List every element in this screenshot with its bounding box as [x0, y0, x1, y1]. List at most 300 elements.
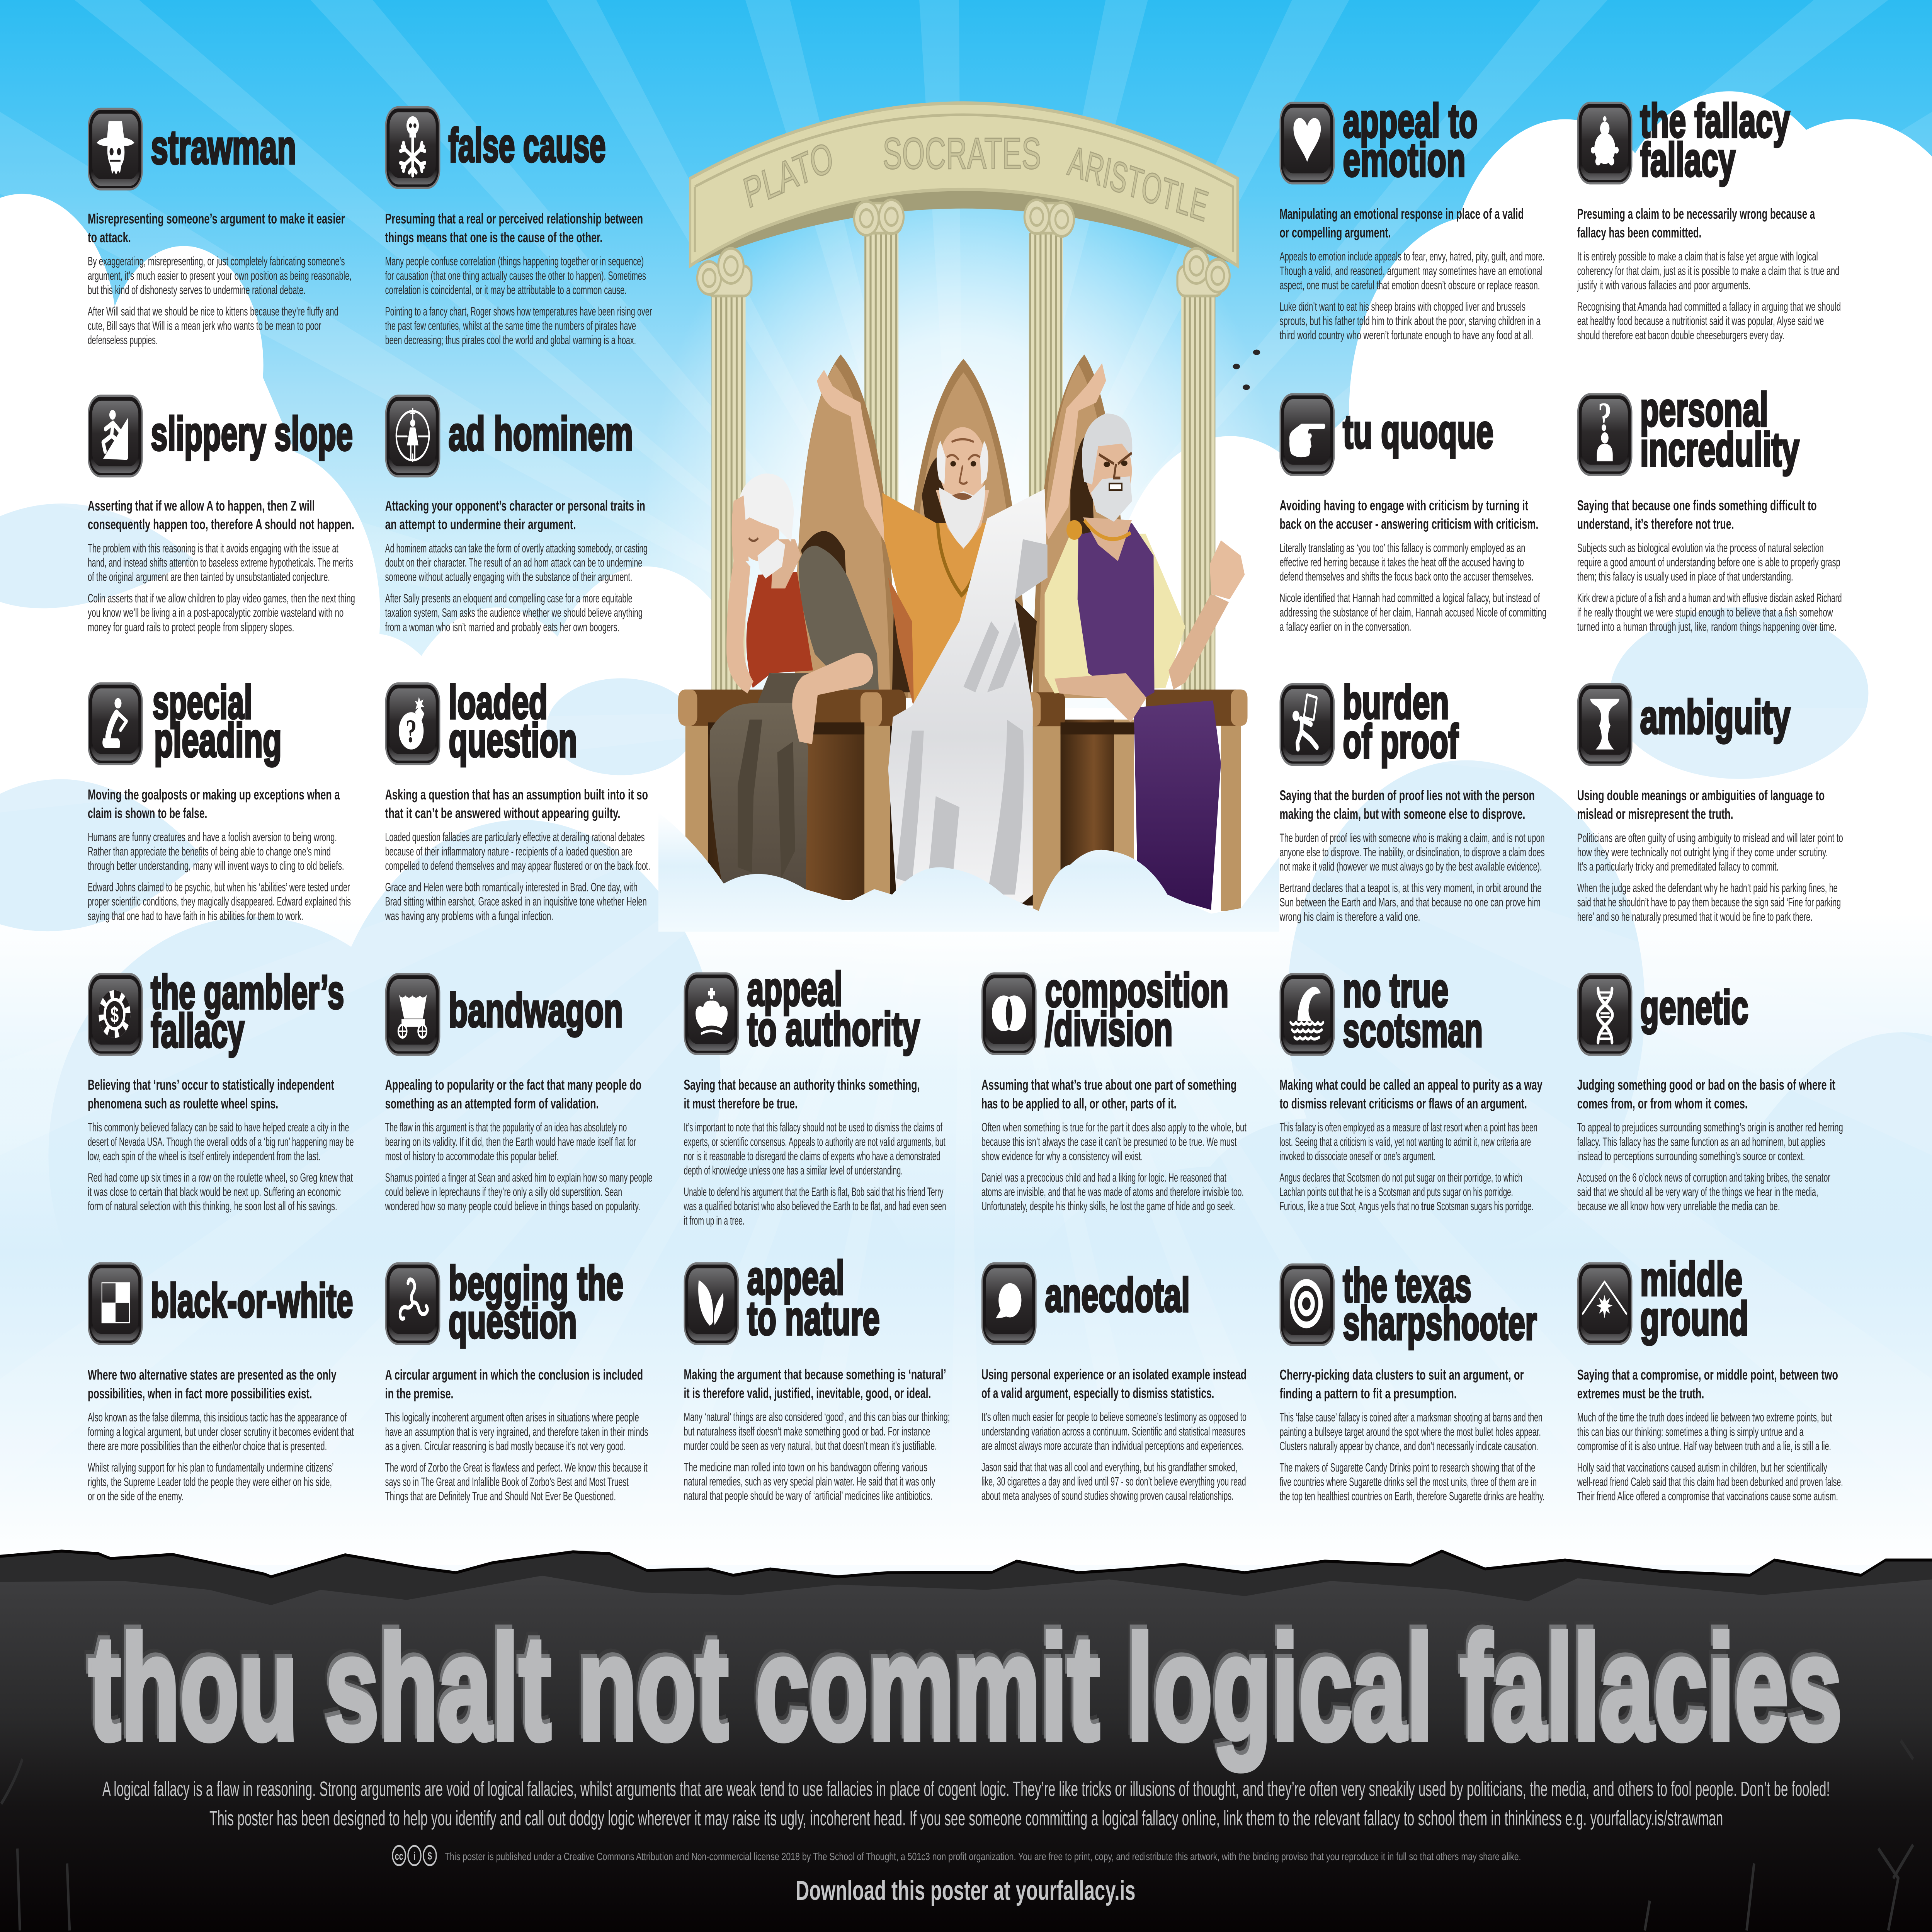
explanation and example: Many people confuse correlation (things happening together or in sequence) [385, 254, 644, 268]
clouds in front of thrones [658, 813, 1279, 932]
card: the gambler's fallacy [88, 966, 354, 1213]
explanation and example: bearing on its validity. If it did, then the Earth would have made itself flat for [385, 1135, 636, 1148]
icon: vase and faces [1577, 683, 1633, 766]
card: genetic [1577, 973, 1843, 1213]
explanation and example: third world country who weren’t fortunate enough to have any food at all. [1279, 328, 1533, 342]
explanation and example: aspect, one must be careful that emotion doesn’t obscure or replace reason. [1279, 278, 1540, 292]
explanation and example: By exaggerating, misrepresenting, or just completely fabricating someone’s [88, 254, 345, 268]
explanation and example [1279, 541, 1546, 633]
title [151, 966, 344, 1058]
explanation and example: wrong his claim is therefore a valid one. [1279, 910, 1420, 923]
explanation and example: been decreasing; thus pirates cool the world and global warming is a hoax. [385, 333, 636, 347]
title: slippery slope [151, 408, 353, 461]
explanation and example: natural remedies, such as very special plain water. He said that it was only [684, 1475, 935, 1488]
figure: Aristotle, clenched fist [1044, 413, 1245, 910]
summary [1577, 206, 1815, 241]
summary: Moving the goalposts or making up exceptions when a [88, 787, 340, 803]
icon: loch ness monster [1279, 973, 1335, 1056]
explanation and example: The flaw in this argument is that the popularity of an idea has absolutely no [385, 1121, 627, 1134]
title: incredulity [1640, 423, 1799, 476]
explanation and example: This logically incoherent argument often arises in situations where people [385, 1410, 639, 1424]
icon: bullseye target [1279, 1264, 1335, 1346]
explanation and example: Colin asserts that if we allow children to play video games, then the next thing [88, 592, 355, 605]
explanation and example: It’s important to note that this fallacy should not be used to dismiss the claims of [684, 1121, 942, 1134]
title [747, 1252, 880, 1345]
title: tu quoque [1343, 405, 1493, 458]
clouds [0, 91, 1932, 1565]
summary [1279, 1367, 1524, 1401]
explanation and example [1279, 250, 1545, 342]
explanation and example [684, 1410, 950, 1503]
explanation and example: Though a valid, and reasoned, argument may sometimes have an emotional [1279, 264, 1543, 277]
icon: heart [1279, 102, 1335, 184]
front columns [711, 293, 1215, 698]
icon: skull and snowflake [385, 106, 440, 189]
explanation and example: desert of Nevada USA. Though the overall odds of a ‘big run’ happening may be [88, 1135, 354, 1148]
explanation and example: To appeal to prejudices surrounding something’s origin is another red herring [1577, 1121, 1843, 1134]
title: question [449, 1295, 577, 1349]
card: special pleading [88, 676, 351, 923]
title: to authority [747, 1003, 920, 1056]
stone arch with names: ARISTOTLE [1065, 137, 1211, 231]
explanation and example: there are more possibilities than the either/or choice that is presented. [88, 1439, 327, 1453]
title: ambiguity [1640, 691, 1790, 744]
title: strawman [151, 121, 296, 174]
summary: Appealing to popularity or the fact that many people do [385, 1077, 641, 1093]
stone footer panel [0, 1543, 1932, 1932]
icon: DNA helix [1577, 973, 1633, 1056]
title: genetic [1640, 981, 1748, 1034]
card: ad hominem [385, 395, 648, 634]
summary [1577, 1367, 1838, 1401]
intro text: A logical fallacy is a flaw in reasoning. Strong arguments are void of logical fallacies, whilst arguments that are weak tend to use fallacies in place of cogent logic. They’re like tricks or illusions of thought, and they’re often very sneakily used by politicians, the media, and others to fool people. Don’t be fooled! [102, 1777, 1830, 1801]
summary [88, 211, 345, 245]
summary [1577, 1077, 1835, 1112]
summary: Judging something good or bad on the basis of where it [1577, 1077, 1835, 1093]
explanation and example: This ‘false cause’ fallacy is coined after a marksman shooting at barns and then [1279, 1410, 1543, 1424]
summary: making the claim, but with someone else to disprove. [1279, 806, 1525, 822]
explanation and example: because this isn’t always the case it can’t be presumed to be true. We must [981, 1135, 1237, 1148]
title [1343, 1259, 1537, 1350]
icon: casino chip [88, 973, 143, 1056]
icon: crosshair on person [385, 395, 440, 478]
icon: crown [684, 972, 739, 1055]
explanation and example: it from up in a tree. [684, 1214, 745, 1227]
explanation and example: It’s often much easier for people to believe someone’s testimony as opposed to [981, 1410, 1247, 1424]
figure: Plato, head in hand [710, 473, 879, 889]
stone arch with names: SOCRATES [883, 129, 1041, 178]
card: ambiguity [1577, 683, 1843, 923]
explanation and example: a fallacy earlier on in the conversation. [1279, 620, 1411, 633]
summary [1577, 787, 1825, 822]
title [1640, 383, 1799, 476]
title [1045, 964, 1229, 1056]
explanation and example: if he really thought we were stupid enough to believe that a fish somehow [1577, 605, 1833, 619]
rock top face [0, 1553, 1932, 1640]
explanation and example: understanding variation across a continuum. Scientific and statistical measures [981, 1425, 1245, 1438]
summary: A circular argument in which the conclusion is included [385, 1367, 643, 1383]
icon: speech bubble [981, 1262, 1037, 1345]
explanation and example: After Sally presents an eloquent and compelling case for a more equitable [385, 592, 632, 605]
explanation and example [385, 541, 648, 634]
explanation and example: This fallacy is often employed as a measure of last resort when a point has been [1279, 1121, 1537, 1134]
explanation and example [981, 1121, 1247, 1213]
title [153, 676, 282, 767]
card: appeal to authority [684, 963, 946, 1227]
explanation and example: Whilst rallying support for his plan to fundamentally undermine citizens’ [88, 1461, 334, 1474]
title: appeal to [1343, 94, 1478, 148]
throne seats [678, 689, 1247, 911]
explanation and example: addressing the substance of her claim, Hannah accused Nicole of committing [1279, 605, 1546, 619]
explanation and example: The makers of Sugarette Candy Drinks point to research showing that of the [1279, 1461, 1535, 1474]
intro text: This poster has been designed to help you identify and call out dodgy logic wherever it may raise its ugly, incoherent head. If you see someone committing a logical fallacy online, link them to the relevant fallacy to school them in thinkiness e.g. yourfallacy.is/strawman [209, 1806, 1723, 1830]
explanation and example: someone without actually engaging with the substance of their argument. [385, 570, 632, 584]
explanation and example: Brad sitting within earshot, Grace asked in an inquisitive tone whether Helen [385, 895, 647, 908]
summary [1279, 497, 1538, 532]
icon: kneeling figure [88, 682, 143, 765]
explanation and example: them; this fallacy is usually used in place of that understanding. [1577, 570, 1793, 583]
summary: Where two alternative states are presented as the only [88, 1367, 337, 1383]
explanation and example: compelled to defend themselves and may appear flustered or on the back foot. [385, 859, 650, 872]
summary [88, 787, 340, 821]
title: begging the [449, 1257, 623, 1310]
summary: Attacking your opponent’s character or personal traits in [385, 498, 645, 514]
summary: comes from, or from whom it comes. [1577, 1095, 1748, 1112]
explanation and example: most of history to accommodate this popular belief. [385, 1149, 559, 1163]
explanation and example: The medicine man rolled into town on his bandwagon offering various [684, 1460, 927, 1474]
explanation and example: form of natural selection with this thinking, he soon lost all of his savings. [88, 1199, 337, 1213]
explanation and example: are almost always more accurate than individual perceptions and experiences. [981, 1439, 1244, 1452]
summary: Manipulating an emotional response in place of a valid [1279, 206, 1524, 222]
explanation and example: coherency for that claim, just as it is possible to make a claim that is true and [1577, 264, 1839, 277]
title: the texas [1343, 1259, 1471, 1312]
summary: fallacy has been committed. [1577, 224, 1701, 241]
explanation and example [1279, 1121, 1537, 1213]
icon: bomb with question mark: ? [406, 713, 417, 749]
explanation and example: atoms are invisible, and that he was made of atoms and therefore invisible too. [981, 1185, 1244, 1199]
summary: phenomena such as roulette wheel spins. [88, 1095, 278, 1112]
explanation and example: argument, it’s much easier to present your own position as being reasonable, [88, 269, 352, 282]
explanation and example: Clusters naturally appear by chance, and don’t necessarily indicate causation. [1279, 1439, 1538, 1453]
title: composition [1045, 964, 1229, 1017]
explanation and example: forming a logical argument, but under closer scrutiny it becomes evident that [88, 1425, 354, 1439]
explanation and example: from a woman who isn’t married and probably eats her own boogers. [385, 620, 619, 634]
explanation and example: anyone else to disprove. The inability, or disinclination, to disprove a claim does [1279, 845, 1545, 859]
explanation and example: should therefore eat bacon double cheeseburgers every day. [1577, 328, 1784, 342]
explanation and example: hand, and instead shifts attention to baseless extreme hypotheticals. The merits [88, 556, 353, 570]
explanation and example: Loaded question fallacies are particularly effective at derailing rational debates [385, 830, 645, 844]
title: question [449, 714, 577, 767]
icon: road with splat [1577, 1262, 1633, 1345]
summary [385, 787, 648, 821]
explanation and example: Unable to defend his argument that the Earth is flat, Bob said that his friend Terry [684, 1185, 944, 1199]
explanation and example [88, 1410, 354, 1503]
explanation and example: murder could be seen as very natural, but that doesn’t mean it’s justifiable. [684, 1439, 937, 1452]
card: bandwagon [385, 973, 653, 1213]
explanation and example: but naturalness itself doesn’t make something good or bad. For instance [684, 1425, 930, 1438]
explanation and example: for causation (that one thing actually causes the other to happen). Sometimes [385, 269, 646, 282]
explanation and example: Their friend Alice offered a compromise that vaccinations cause some autism. [1577, 1489, 1838, 1503]
card: the fallacy fallacy [1577, 94, 1841, 342]
summary: or compelling argument. [1279, 224, 1391, 241]
explanation and example: cute, Bill says that Will is a mean jerk who wants to be mean to poor [88, 319, 321, 333]
explanation and example: Jason said that that was all cool and everything, but his grandfather smoked, [981, 1460, 1237, 1474]
title [449, 1257, 623, 1349]
explanation and example: how they were technically not outright lying if they come under scrutiny. [1577, 845, 1828, 859]
throne backs [795, 354, 1132, 698]
title: sharpshooter [1343, 1297, 1537, 1350]
explanation and example: Daniel was a precocious child and had a liking for logic. He reasoned that [981, 1171, 1226, 1184]
summary [385, 498, 645, 532]
explanation and example: Angus declares that Scotsmen do not put sugar on their porridge, to which [1279, 1171, 1522, 1184]
summary: claim is shown to be false. [88, 805, 207, 821]
explanation and example: Subjects such as biological evolution via the process of natural selection [1577, 541, 1824, 554]
explanation and example [385, 830, 650, 923]
title: fallacy [151, 1005, 245, 1058]
stone arch with names [690, 103, 1238, 266]
icon: creative commons badges: i [413, 1850, 415, 1862]
summary [1577, 497, 1817, 532]
explanation and example: Bertrand declares that a teapot is, at this very moment, in orbit around the [1279, 881, 1542, 895]
card: the texas sharpshooter [1279, 1259, 1545, 1503]
summary: has to be applied to all, or other, parts of it. [981, 1095, 1177, 1112]
explanation and example [385, 1410, 648, 1503]
summary: back on the accuser - answering criticism with criticism. [1279, 516, 1538, 532]
summary: extremes must be the truth. [1577, 1386, 1704, 1401]
explanation and example [981, 1410, 1247, 1503]
explanation and example: Ad hominem attacks can take the form of overtly attacking somebody, or casting [385, 541, 648, 555]
explanation and example: Kirk drew a picture of a fish and a human and with effusive disdain asked Richard [1577, 591, 1842, 605]
icon: bomb with question mark [385, 682, 440, 765]
summary: possibilities, when in fact more possibilities exist. [88, 1386, 312, 1401]
explanation and example [684, 1121, 946, 1227]
explanation and example: Recognising that Amanda had committed a fallacy in arguing that we should [1577, 300, 1841, 313]
explanation and example: because of their inflammatory nature - recipients of a loaded question are [385, 845, 632, 858]
explanation and example: said that we should all be very wary of the things we hear in the media, [1577, 1185, 1818, 1199]
explanation and example [385, 254, 652, 347]
summary: understand, it’s therefore not true. [1577, 516, 1734, 532]
explanation and example: because we all know how very unreliable the media can be. [1577, 1199, 1780, 1213]
explanation and example: sprouts, but his father told him to think about the poor, starving children in a [1279, 314, 1541, 328]
explanation and example: rights, the Supreme Leader told the people they were either on his side, [88, 1475, 332, 1489]
figure: Socrates, arms raised [817, 363, 1106, 903]
title [1640, 94, 1790, 187]
icon: creative commons badges [393, 1846, 436, 1865]
explanation and example [1279, 831, 1545, 923]
summary: consequently happen too, therefore A should not happen. [88, 517, 354, 532]
summary: Saying that a compromise, or middle point, between two [1577, 1367, 1838, 1383]
explanation and example: the past few centuries, whilst at the same time the numbers of pirates have [385, 319, 636, 333]
title: the gambler’s [151, 966, 344, 1019]
main headline: thou shalt not commit logical fallacies [85, 1597, 1839, 1764]
icon: creative commons badges: cc [395, 1850, 403, 1862]
explanation and example: or on the side of the enemy. [88, 1489, 184, 1503]
explanation and example: Many ‘natural’ things are also considered ‘good’, and this can bias our thinking; [684, 1410, 950, 1424]
summary: Asking a question that has an assumption built into it so [385, 787, 648, 803]
summary: that it can’t be answered without appearing guilty. [385, 805, 621, 821]
summary: mislead or misrepresent the truth. [1577, 806, 1733, 822]
explanation and example [88, 254, 352, 347]
explanation and example: well-read friend Caleb said that this claim had been debunked and proven false. [1577, 1475, 1843, 1489]
summary: Presuming that a real or perceived relationship between [385, 211, 643, 227]
summary: Avoiding having to engage with criticism by turning it [1279, 497, 1528, 514]
explanation and example: about meta analyses of sound studies showing proven causal relationships. [981, 1489, 1234, 1503]
explanation and example: The burden of proof lies with someone who is making a claim, and is not upon [1279, 831, 1545, 845]
explanation and example: but this kind of dishonesty serves to undermine rational debate. [88, 283, 306, 297]
explanation and example: Appeals to emotion include appeals to fear, envy, hatred, pity, guilt, and more. [1279, 250, 1545, 263]
summary: Cherry-picking data clusters to suit an argument, or [1279, 1367, 1524, 1383]
explanation and example [88, 541, 355, 634]
summary: an attempt to undermine their argument. [385, 517, 576, 532]
main headline: thou shalt not commit logical fallacies [89, 1605, 1842, 1772]
explanation and example: doubt on their character. The result of an ad hom attack can be to undermine [385, 556, 642, 570]
cracks [1, 1740, 1913, 1930]
title: ground [1640, 1292, 1748, 1345]
title: the fallacy [1640, 94, 1790, 148]
title: bandwagon [449, 984, 623, 1037]
explanation and example: proper scientific conditions, they magically disappeared. Edward explained this [88, 895, 351, 908]
summary: to attack. [88, 230, 131, 245]
rock face [0, 1576, 1932, 1932]
summary: Making the argument that because something is ‘natural’ [684, 1367, 946, 1383]
explanation and example: Much of the time the truth does indeed lie between two extreme points, but [1577, 1410, 1832, 1424]
explanation and example: it was close to certain that black would be next up. Suffering an economic [88, 1185, 341, 1199]
explanation and example [1577, 831, 1843, 923]
explanation and example: nor is it reasonable to disregard the claims of experts who have a demonstrated [684, 1149, 940, 1163]
title [449, 676, 577, 767]
title: false cause [449, 119, 606, 172]
explanation and example [385, 1121, 653, 1213]
summary: in the premise. [385, 1386, 453, 1401]
icon: venn diagram [981, 972, 1037, 1055]
summary: to dismiss relevant criticisms or flaws of an argument. [1279, 1095, 1527, 1112]
summary: Believing that ‘runs’ occur to statistically independent [88, 1077, 334, 1093]
title: emotion [1343, 134, 1466, 187]
summary: Making what could be called an appeal to purity as a way [1279, 1077, 1543, 1093]
explanation and example [88, 830, 351, 923]
icon: checker square [88, 1262, 143, 1345]
explanation and example: says so in The Great and Infallible Book of Zorbo’s Best and Most Truest [385, 1475, 629, 1489]
card: tu quoque [1279, 393, 1546, 633]
explanation and example: could believe in leprechauns if they’re only a silly old superstition. Sean [385, 1185, 622, 1199]
explanation and example: eat healthy food because a nutritionist said it was popular, Alyse said we [1577, 314, 1824, 328]
back columns [864, 233, 1063, 517]
explanation and example: low, each spin of the wheel is itself entirely independent from the last. [88, 1149, 320, 1163]
explanation and example: defend themselves and shifts the focus back onto the accuser themselves. [1279, 570, 1534, 583]
summary: things means that one is the cause of the other. [385, 230, 602, 245]
icon: casino chip: $ [111, 1002, 119, 1027]
explanation and example: Often when something is true for the part it does also apply to the whole, but [981, 1121, 1247, 1134]
explanation and example: Holly said that vaccinations caused autism in children, but her scientifically [1577, 1461, 1827, 1474]
title: appeal [747, 1252, 845, 1305]
explanation and example: you know we’ll be living a in a post-apocalyptic zombie wasteland with no [88, 606, 344, 619]
explanation and example: Nicole identified that Hannah had committed a logical fallacy, but instead of [1279, 591, 1540, 605]
summary: of a valid argument, especially to dismiss statistics. [981, 1385, 1214, 1401]
title [747, 963, 920, 1056]
explanation and example: of the original argument are then tainted by unsubstantiated conjecture. [88, 570, 330, 584]
explanation and example [1577, 1410, 1843, 1503]
summary [981, 1367, 1247, 1401]
background glow behind temple [640, 112, 1286, 1006]
summary: Using personal experience or an isolated example instead [981, 1367, 1247, 1383]
explanation and example: instead to perceptions surrounding something’s source or context. [1577, 1149, 1805, 1163]
explanation and example: Accused on the 6 o’clock news of corruption and taking bribes, the senator [1577, 1171, 1830, 1184]
explanation and example: Literally translating as ‘you too’ this fallacy is commonly employed as an [1279, 541, 1525, 554]
explanation and example: show evidence for why a consistency will exist. [981, 1149, 1143, 1163]
summary [1279, 1077, 1543, 1112]
explanation and example [1577, 1121, 1843, 1213]
explanation and example: Red had come up six times in a row on the roulette wheel, so Greg knew that [88, 1171, 353, 1184]
explanation and example: Furious, like a true Scot, Angus yells that no true Scotsman sugars his porridge. [1279, 1199, 1534, 1213]
summary: Asserting that if we allow A to happen, then Z will [88, 498, 315, 514]
explanation and example: wondered how so many people could believe in things based on popularity. [385, 1199, 640, 1213]
explanation and example: require a good amount of understanding before one is able to properly grasp [1577, 555, 1840, 569]
title: special [153, 676, 252, 729]
explanation and example: lost. Seeing that a criticism is valid, yet not wanting to admit it, new criteria are [1279, 1135, 1531, 1148]
summary: Using double meanings or ambiguities of language to [1577, 787, 1825, 803]
icon: leaves [684, 1262, 739, 1345]
icon: question mark over person: ? [1598, 394, 1612, 440]
explanation and example: this can bias our thinking: sometimes a thing is simply untrue and a [1577, 1425, 1804, 1439]
title [1343, 94, 1478, 187]
explanation and example: money for guard rails to protect people from slippery slopes. [88, 620, 294, 634]
explanation and example: Rather than appreciate the benefits of being able to change one’s mind [88, 845, 331, 858]
title: loaded [449, 676, 548, 729]
explanation and example: justify it with various fallacies and poor arguments. [1577, 278, 1751, 292]
summary [1279, 787, 1535, 822]
central illustration: temple and three philosophers [658, 75, 1279, 932]
explanation and example: Sun between the Earth and Mars, and that because no one can prove him [1279, 895, 1541, 909]
summary: Saying that because an authority thinks something, [684, 1077, 920, 1093]
column capitals [697, 200, 1230, 296]
explanation and example: The problem with this reasoning is that it avoids engaging with the issue at [88, 541, 338, 555]
title: /division [1045, 1003, 1173, 1056]
title: pleading [154, 714, 282, 767]
explanation and example: compromise of it is also untrue. Half way between truth and a lie, is still a lie. [1577, 1439, 1831, 1453]
explanation and example: depth of knowledge unless one has a similar level of understanding. [684, 1163, 903, 1177]
icon: pointing hand [1279, 393, 1335, 476]
card: begging the question [385, 1257, 648, 1503]
explanation and example: Things that are Definitely True and Should Not Ever Be Questioned. [385, 1489, 616, 1503]
title [1343, 676, 1459, 768]
explanation and example: said that he shouldn’t have to pay them because the sign said ‘Fine for parking [1577, 895, 1841, 909]
card: appeal to nature [684, 1252, 950, 1503]
card: slippery slope [88, 395, 355, 634]
card: composition / division [981, 964, 1247, 1213]
title: no true [1343, 964, 1449, 1017]
title [1640, 1253, 1748, 1345]
explanation and example: Unfortunately, despite his thinky skills, he lost the game of hide and go seek. [981, 1199, 1235, 1213]
summary: Assuming that what’s true about one part of something [981, 1077, 1236, 1093]
icon: question mark over person [1577, 393, 1633, 476]
title: black-or-white [151, 1274, 353, 1328]
explanation and example: Also known as the false dilemma, this insidious tactic has the appearance of [88, 1410, 347, 1424]
card: middle ground [1577, 1253, 1843, 1503]
explanation and example [1279, 1410, 1545, 1503]
explanation and example: correlation is coincidental, or it may be attributable to a common cause. [385, 283, 627, 297]
title: appeal [747, 963, 842, 1016]
explanation and example: saying that one had to have faith in his abilities for them to work. [88, 909, 303, 923]
explanation and example: as a given. Circular reasoning is bad mostly because it’s not very good. [385, 1439, 626, 1453]
summary [88, 1367, 337, 1401]
summary: Saying that the burden of proof lies not with the person [1279, 787, 1535, 803]
summary [385, 1077, 641, 1112]
summary: Misrepresenting someone’s argument to make it easier [88, 211, 345, 227]
explanation and example: It’s a particularly tricky and premeditated fallacy to commit. [1577, 860, 1779, 873]
title: to nature [747, 1292, 880, 1345]
explanation and example: defenseless puppies. [88, 333, 158, 347]
icon: triskelion of question marks [385, 1262, 440, 1345]
